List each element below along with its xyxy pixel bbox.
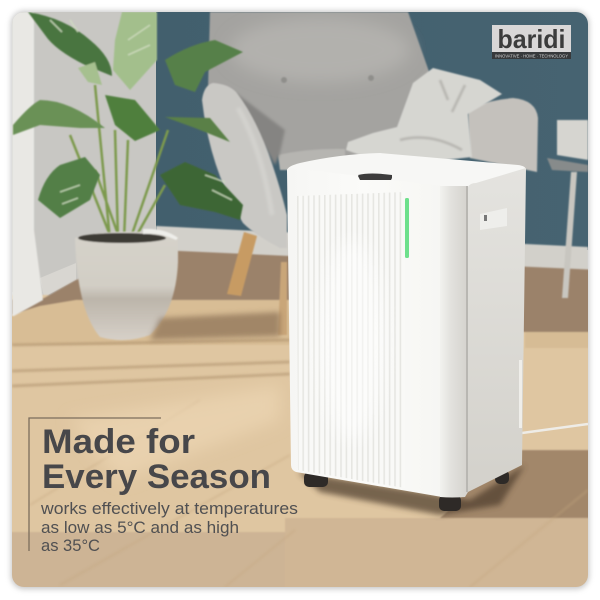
diagonal grain	[34, 464, 586, 531]
heading	[42, 423, 271, 496]
ribbed highlight	[320, 240, 384, 440]
chair shadow	[238, 94, 286, 165]
baseboard	[156, 226, 588, 272]
curtain	[12, 12, 43, 316]
water tank slit	[519, 360, 522, 428]
heading: Made for	[42, 423, 195, 461]
control panel on lip	[358, 175, 392, 180]
chair back highlight	[230, 18, 410, 82]
leaves	[13, 12, 243, 220]
chair seat	[278, 149, 345, 170]
chair back	[208, 12, 432, 165]
sunlight patches	[83, 390, 276, 473]
chair arm highlight	[238, 108, 272, 215]
logo wordmark: baridi	[498, 24, 566, 54]
description: as 35°C	[41, 537, 100, 555]
bottom left shadow plank	[12, 532, 285, 587]
armchair	[202, 12, 538, 335]
bottom right plank	[285, 518, 588, 587]
right light plank	[526, 332, 588, 348]
base floor	[12, 294, 588, 533]
power cord	[522, 424, 588, 433]
green indicator light	[405, 198, 409, 258]
blue wall	[156, 12, 588, 250]
chair right arm	[468, 98, 538, 172]
stems	[70, 85, 168, 240]
wheels	[304, 470, 509, 511]
plant shadow	[150, 312, 280, 340]
description: works effectively at temperatures	[40, 500, 298, 518]
logo background	[492, 25, 571, 53]
right floor band	[440, 450, 600, 518]
seam	[466, 186, 468, 492]
side handle	[480, 208, 507, 230]
chair left arm	[202, 83, 287, 248]
logo strip	[492, 52, 571, 59]
dehumidifier shadow	[298, 465, 525, 515]
chair leg left	[227, 232, 257, 296]
left baseboard	[40, 263, 76, 297]
chair button right	[368, 75, 374, 81]
handle recess	[484, 215, 487, 221]
floor	[0, 250, 600, 600]
text block frame	[29, 418, 161, 551]
front face	[287, 168, 442, 497]
ribbed front panel	[297, 192, 405, 488]
control panel	[358, 174, 392, 178]
left wall	[12, 12, 123, 24]
dehumidifier	[287, 153, 588, 511]
logo	[492, 24, 571, 59]
top surface	[287, 153, 526, 188]
rear dark floor	[0, 250, 600, 332]
heading: Every Season	[42, 458, 271, 496]
chair leg right	[278, 262, 287, 335]
blanket	[346, 68, 502, 160]
side panel	[468, 168, 526, 492]
side table	[547, 120, 588, 298]
corner panel	[440, 186, 468, 498]
description: as low as 5°C and as high	[41, 519, 239, 537]
floor plank lines	[12, 340, 290, 386]
rear light plank	[0, 300, 290, 345]
description	[40, 500, 298, 555]
chair button left	[281, 77, 287, 83]
potted plant	[13, 12, 243, 340]
logo tagline: INNOVATIVE · HOME · TECHNOLOGY	[495, 54, 568, 58]
pot	[75, 229, 178, 340]
